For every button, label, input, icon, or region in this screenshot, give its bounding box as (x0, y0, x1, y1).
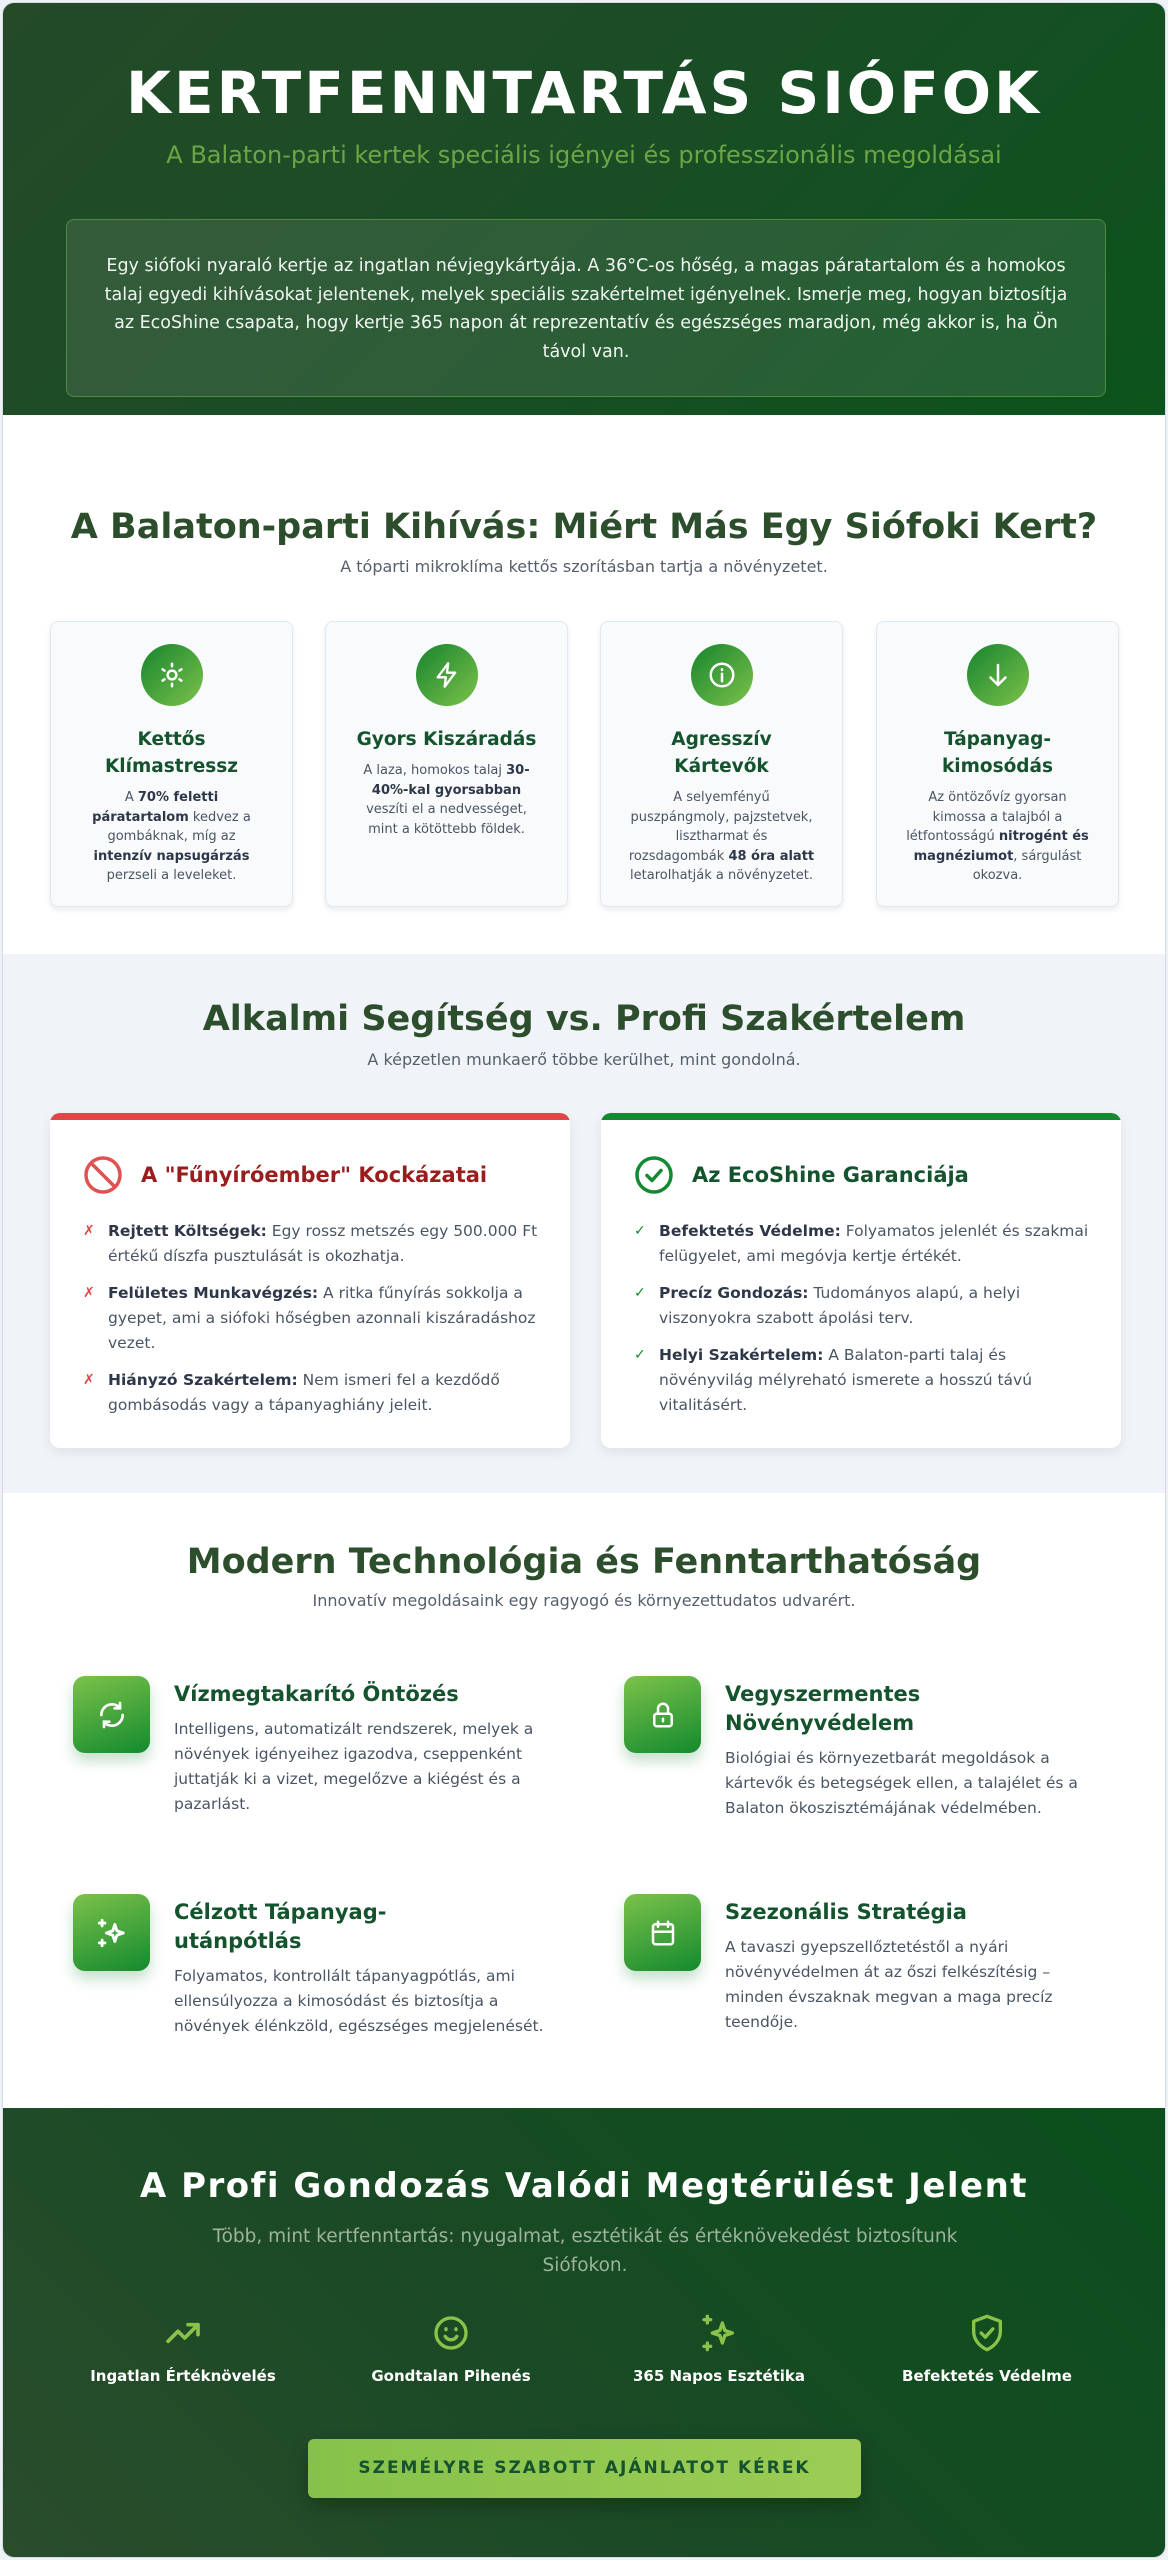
card: Gyors Kiszáradás: mint a kötöttebb földek. (368, 822, 525, 836)
risk list: értékű díszfa pusztulását is okozhatja. (108, 1247, 405, 1265)
icon: calendar (624, 1894, 701, 1971)
card: Agresszív Kártevők: rozsdagombák 48 óra alatt (629, 848, 814, 864)
footer section (3, 2108, 1165, 2560)
guarantee list: viszonyokra szabott ápolási terv. (659, 1309, 913, 1327)
card: Agresszív Kártevők: A selyemfényű (673, 790, 770, 805)
guarantee list: ✓ (634, 1223, 646, 1239)
text: Célzott Tápanyag- (174, 1900, 386, 1924)
intro box (66, 219, 1106, 397)
text: Intelligens, automatizált rendszerek, melyek a növények igényeihez igazodva, cseppenként juttatják ki a vizet, megelőzve a kiégést és a pazarlást. (174, 1720, 533, 1813)
guarantee list: vitalitásért. (659, 1396, 747, 1414)
guarantee list: Befektetés Védelme: Folyamatos jelenlét és szakmai (659, 1222, 1088, 1240)
text: Vízmegtakarító Öntözés (174, 1682, 459, 1706)
card: Agresszív Kártevők: lisztharmat és (676, 829, 767, 844)
risk list: Hiányzó Szakértelem: Nem ismeri fel a kezdődő (108, 1371, 500, 1389)
icon: refresh (73, 1676, 150, 1753)
benefit: value: Ingatlan Értéknövelés (90, 2367, 276, 2385)
risk list: ✗ (83, 1372, 95, 1388)
benefit: value (90, 2322, 276, 2385)
feature: water (66, 1676, 533, 1813)
panel heading: guarantee (635, 1156, 969, 1194)
guarantee list (634, 1222, 1088, 1414)
card: Gyors Kiszáradás: A laza, homokos talaj 30- (363, 763, 530, 778)
feature: nutrients (66, 1894, 544, 2035)
guarantee list: felügyelet, ami megóvja kertje értékét. (659, 1247, 962, 1265)
card: Tápanyag-kimosódás: kimossa a talajból a (933, 810, 1062, 824)
text: A tavaszi gyepszellőztetéstől a nyári növényvédelmen át az őszi felkészítésig – minden évszaknak megvan a maga precíz teendője. (725, 1938, 1053, 2031)
intro box: Egy siófoki nyaraló kertje az ingatlan névjegykártyája. A 36°C-os hőség, a magas páratartalom és a homokos talaj egyedi kihívásokat jelentenek, melyek speciális szakértelmet igényelnek. Ismerje meg, hogyan biztosítja az EcoShine csapata, hogy kertje 365 napon át reprezentatív és egészséges maradjon, még akkor is, ha Ön távol van. (105, 256, 1067, 362)
card: Kettős Klímastressz: Kettős Klímastressz (105, 729, 238, 777)
risk list: gyepet, ami a siófoki hőségben azonnali kiszáradáshoz (108, 1309, 536, 1327)
risk list: Felületes Munkavégzés: A ritka fűnyírás sokkolja a (108, 1284, 523, 1302)
panel heading: guarantee: Az EcoShine Garanciája (692, 1163, 969, 1187)
panel: guarantee (601, 1113, 1121, 1448)
heading: Modern Technológia és Fenntarthatóság (187, 1542, 981, 1582)
icon: sparkles (702, 2314, 734, 2352)
icon: smile (434, 2316, 468, 2350)
risk list: ✗ (83, 1285, 95, 1301)
icon: trend up (166, 2322, 200, 2344)
text: ellensúlyozza a kimosódást és biztosítja a (174, 1992, 498, 2010)
risk list: gombásodás vagy a tápanyaghiány jeleit. (108, 1396, 432, 1414)
icon: sparkles (73, 1894, 150, 1971)
subheading: A tóparti mikroklíma kettős szorításban tartja a növényzetet. (340, 557, 828, 576)
CTA button (308, 2439, 861, 2498)
card: Agresszív Kártevők: Agresszív (671, 729, 772, 750)
heading: Alkalmi Segítség vs. Profi Szakértelem (203, 999, 965, 1039)
header section (3, 3, 1165, 415)
risk list: vezet. (108, 1334, 155, 1352)
risk list (83, 1222, 537, 1414)
benefit: protection: Befektetés Védelme (902, 2367, 1072, 2385)
benefit: aesthetics: 365 Napos Esztétika (633, 2367, 805, 2385)
risk list: ✗ (83, 1223, 95, 1239)
text: Folyamatos, kontrollált tápanyagpótlás, ami (174, 1967, 515, 1985)
section: technology (3, 1493, 1165, 2108)
subheading: Innovatív megoldásaink egy ragyogó és környezettudatos udvarért. (312, 1591, 856, 1610)
heading: A Balaton-parti Kihívás: Miért Más Egy Siófoki Kert? (71, 507, 1097, 547)
footer heading: A Profi Gondozás Valódi Megtérülést Jelent (140, 2166, 1028, 2206)
card: Agresszív Kártevők: letarolhatják a növényzetet. (630, 868, 813, 883)
benefit: protection (902, 2314, 1072, 2385)
card: Gyors Kiszáradás: 40%-kal gyorsabban (372, 782, 521, 798)
card: Kettős Klímastressz: perzseli a leveleket. (107, 868, 236, 883)
card: Gyors Kiszáradás: veszíti el a nedvességet, (366, 802, 527, 817)
card: Tápanyag-kimosódás (876, 621, 1119, 907)
icon: sun (140, 644, 202, 706)
icon: bolt (416, 644, 478, 706)
section: comparison (3, 954, 1165, 1493)
feature: seasonal (616, 1894, 1053, 2031)
card: Kettős Klímastressz: A 70% feletti (125, 790, 218, 805)
card: Agresszív Kártevők: Kártevők (674, 756, 769, 777)
card: Kettős Klímastressz (50, 621, 293, 907)
benefit: relax (371, 2316, 531, 2385)
title: KERTFENNTARTÁS SIÓFOK (126, 59, 1042, 127)
benefit: relax: Gondtalan Pihenés (371, 2367, 531, 2385)
card: Tápanyag-kimosódás: magnéziumot, sárgulást (914, 848, 1081, 864)
guarantee list: Precíz Gondozás: Tudományos alapú, a helyi (659, 1284, 1020, 1302)
card: Kettős Klímastressz: páratartalom kedvez a (92, 810, 251, 824)
card: Gyors Kiszáradás: Gyors Kiszáradás (357, 729, 536, 750)
subtitle: A Balaton-parti kertek speciális igényei és professzionális megoldásai (166, 141, 1002, 169)
text: utánpótlás (174, 1929, 301, 1953)
text: növények élénkzöld, egészséges megjelenését. (174, 2017, 544, 2035)
card: Gyors Kiszáradás (325, 621, 568, 907)
guarantee list: ✓ (634, 1347, 646, 1363)
card: Agresszív Kártevők (600, 621, 843, 907)
guarantee list: Helyi Szakértelem: A Balaton-parti talaj és (659, 1346, 1006, 1364)
text: Biológiai és környezetbarát megoldások a kártevők és betegségek ellen, a talajélet és a Balaton ökoszisztémájának védelmében. (725, 1749, 1078, 1817)
CTA button: SZEMÉLYRE SZABOTT AJÁNLATOT KÉREK (358, 2458, 811, 2478)
guarantee list: ✓ (634, 1285, 646, 1301)
text: Vegyszermentes Növényvédelem (725, 1682, 920, 1735)
card: Tápanyag-kimosódás: okozva. (973, 868, 1022, 883)
icon: shield check (972, 2314, 1002, 2352)
footer subtitle: Több, mint kertfenntartás: nyugalmat, esztétikát és értéknövekedést biztosítunk Siófokon. (213, 2226, 957, 2276)
section: challenges (3, 415, 1165, 954)
feature: chemical-free (616, 1676, 1078, 1817)
icon: lock (624, 1676, 701, 1753)
card: Tápanyag-kimosódás: Tápanyag-kimosódás (942, 729, 1053, 777)
card: Kettős Klímastressz: gombáknak, míg az (107, 829, 236, 844)
panel heading: risks: A "Fűnyíróember" Kockázatai (141, 1163, 487, 1187)
card: Tápanyag-kimosódás: Az öntözővíz gyorsan (928, 790, 1067, 805)
panel: risks (50, 1113, 570, 1448)
text: Szezonális Stratégia (725, 1900, 967, 1924)
risk list: Rejtett Költségek: Egy rossz metszés egy 500.000 Ft (108, 1222, 537, 1240)
card: Kettős Klímastressz: intenzív napsugárzás (94, 848, 249, 864)
icon: info (690, 644, 752, 706)
card: Tápanyag-kimosódás: létfontosságú nitrogént és (906, 829, 1089, 844)
card: Agresszív Kártevők: puszpángmoly, pajzstetvek, (631, 810, 812, 824)
benefit: aesthetics (633, 2314, 805, 2385)
subheading: A képzetlen munkaerő többe kerülhet, mint gondolná. (367, 1050, 801, 1069)
guarantee list: növényvilág mélyreható ismerete a hosszú távú (659, 1371, 1032, 1389)
panel heading: risks (84, 1156, 487, 1194)
icon: arrow down (966, 644, 1028, 706)
